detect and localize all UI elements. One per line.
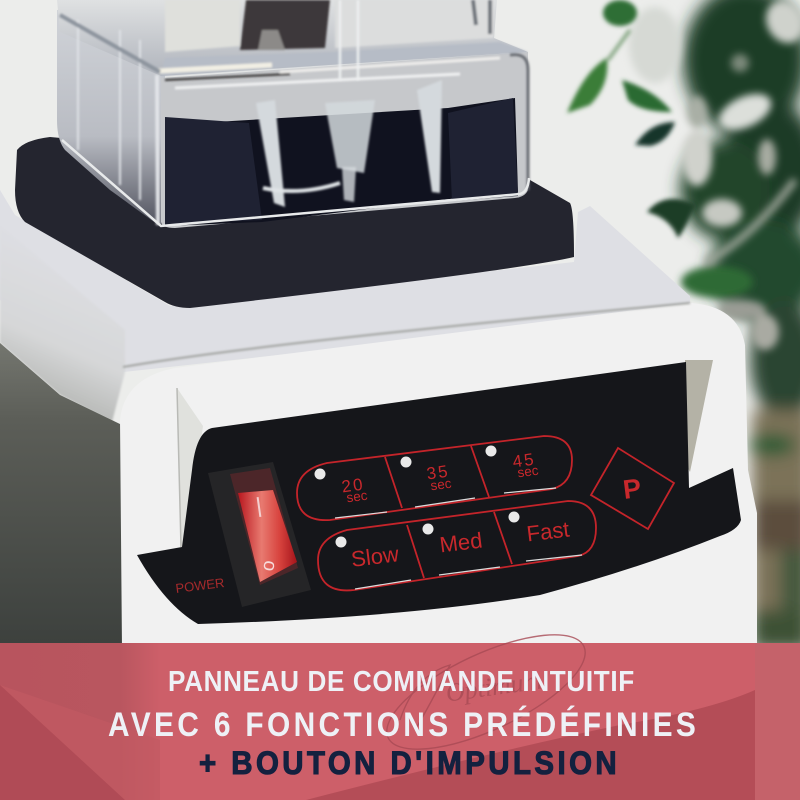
red rocker bbox=[238, 490, 297, 582]
blender body front bbox=[120, 303, 757, 650]
pulse button: P bbox=[621, 473, 643, 505]
product logo watermark bbox=[372, 612, 600, 772]
rubber pad bbox=[15, 137, 574, 308]
caption banner bbox=[0, 612, 800, 800]
power label: POWER bbox=[175, 575, 225, 596]
jar base with glass bbox=[15, 0, 574, 308]
upper jar body bbox=[57, 0, 528, 76]
agitator fins bbox=[256, 0, 442, 207]
product logo watermark: Optimum bbox=[444, 665, 544, 708]
headline line 2: AVEC 6 FONCTIONS PRÉDÉFINIES bbox=[108, 705, 696, 743]
headline line 1: PANNEAU DE COMMANDE INTUITIF bbox=[168, 665, 634, 697]
headline line 3: + BOUTON D'IMPULSION bbox=[199, 745, 617, 781]
plant foliage bbox=[567, 0, 800, 650]
pulse button bbox=[591, 448, 674, 529]
glass jar left side bbox=[57, 0, 165, 227]
switch marks bbox=[257, 497, 281, 573]
glass base edge highlight bbox=[62, 140, 529, 226]
foreground leaves bbox=[567, 0, 695, 238]
timer buttons: sec bbox=[429, 476, 453, 493]
timer buttons: 20 bbox=[340, 474, 366, 496]
black control panel bbox=[137, 362, 741, 624]
foliage base mass bbox=[680, 0, 800, 650]
switch marks: o bbox=[258, 559, 281, 573]
timer buttons: sec bbox=[345, 488, 369, 505]
speed buttons: Slow bbox=[350, 541, 400, 572]
timer buttons bbox=[297, 436, 572, 520]
glass jar front bbox=[161, 52, 528, 228]
dark mechanism blocks bbox=[165, 98, 518, 226]
speed buttons bbox=[318, 501, 596, 590]
rocker surround bbox=[230, 468, 298, 585]
foliage highlights bbox=[629, 0, 800, 350]
blender body left face bbox=[0, 343, 122, 650]
control hood bbox=[123, 303, 713, 547]
timer buttons: 45 bbox=[511, 449, 537, 471]
blender body top surface bbox=[0, 190, 690, 372]
speed buttons: Fast bbox=[525, 516, 571, 547]
switch housing bbox=[208, 462, 311, 607]
speed buttons: Med bbox=[438, 527, 484, 558]
blender body left ledge bbox=[0, 225, 125, 422]
jar interior reflections bbox=[60, 0, 528, 225]
timer buttons: 35 bbox=[425, 461, 451, 483]
power switch bbox=[175, 462, 311, 607]
timer buttons: sec bbox=[516, 463, 540, 480]
